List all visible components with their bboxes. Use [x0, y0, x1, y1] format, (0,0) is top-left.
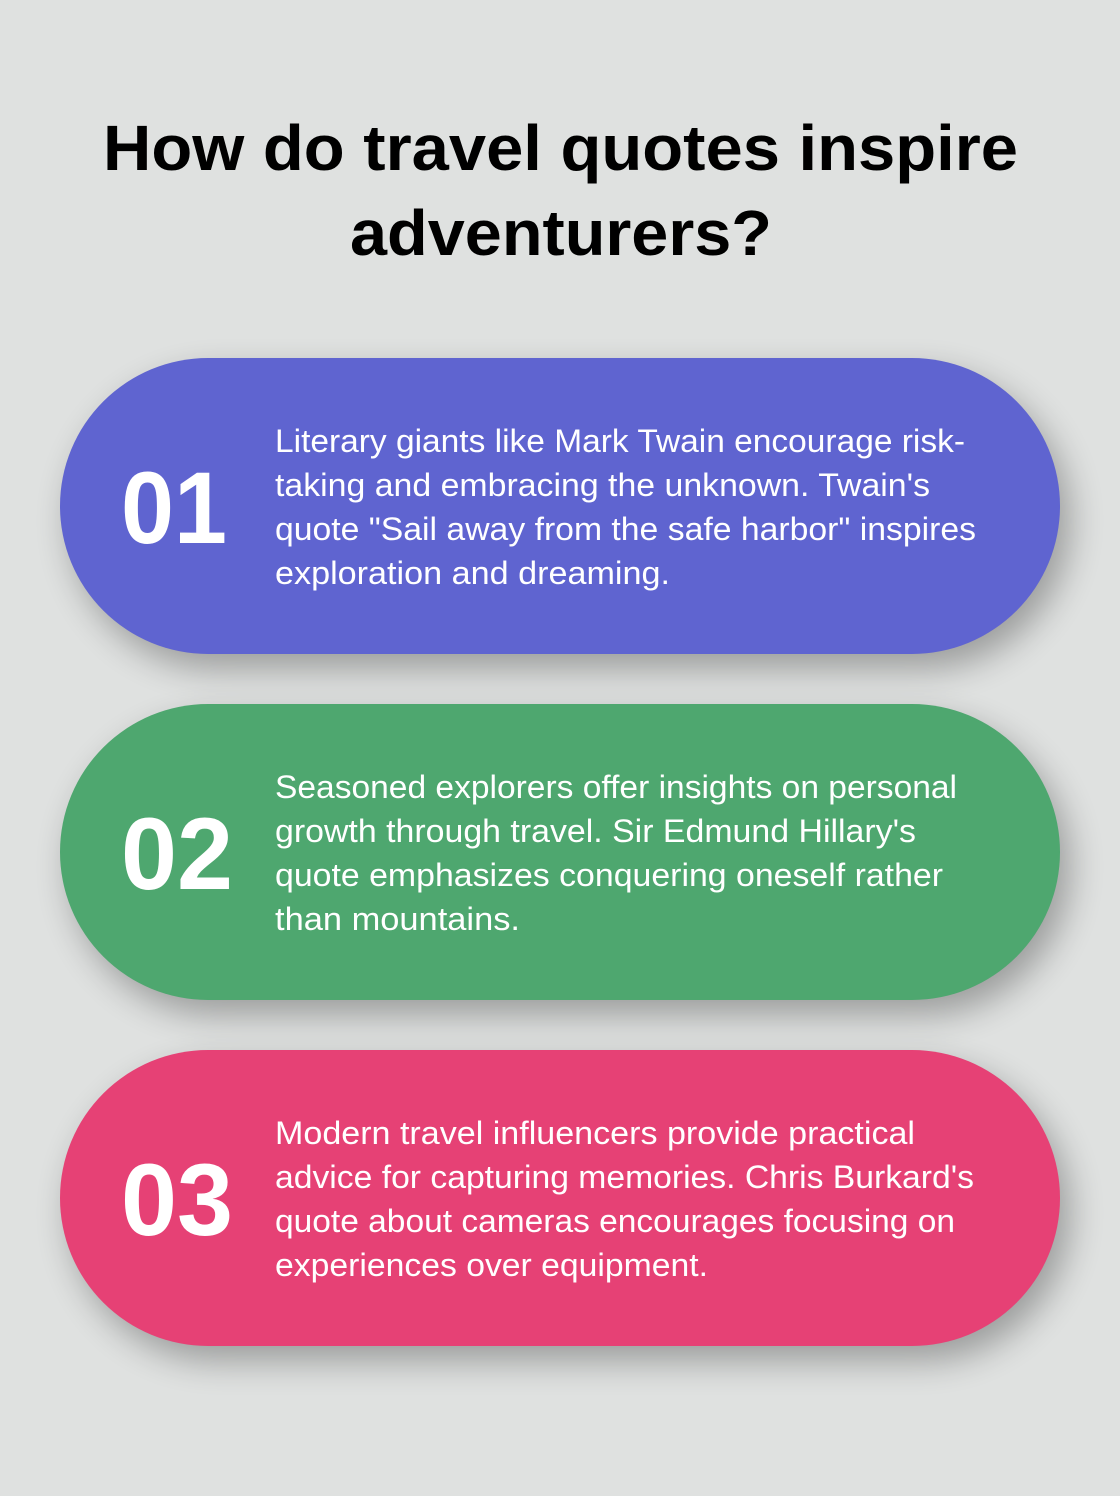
- number 03: 03: [121, 1143, 233, 1257]
- text block: seasoned explorers: quote emphasizes conquering oneself rather: [275, 857, 943, 893]
- panel: step 02: [60, 704, 1070, 1015]
- text block: literary giants: Literary giants like Mark Twain encourage risk-: [275, 423, 965, 459]
- text block: literary giants: taking and embracing the unknown. Twain's: [275, 467, 930, 503]
- title: [103, 112, 1018, 269]
- number 02: 02: [121, 797, 233, 911]
- text block: modern influencers: quote about cameras encourages focusing on: [275, 1203, 955, 1239]
- text block: seasoned explorers: growth through travel. Sir Edmund Hillary's: [275, 813, 916, 849]
- text block: seasoned explorers: [275, 769, 957, 937]
- title: adventurers?: [350, 197, 772, 269]
- text block: modern influencers: advice for capturing memories. Chris Burkard's: [275, 1159, 974, 1195]
- text block: literary giants: exploration and dreaming.: [275, 555, 670, 591]
- number 01: 01: [121, 451, 227, 565]
- panel: step 03: [60, 1050, 1070, 1361]
- panel: step 01: [60, 358, 1070, 669]
- title: How do travel quotes inspire: [103, 112, 1018, 184]
- text block: seasoned explorers: than mountains.: [275, 901, 520, 937]
- text block: modern influencers: Modern travel influencers provide practical: [275, 1115, 915, 1151]
- text block: literary giants: [275, 423, 976, 591]
- text block: seasoned explorers: Seasoned explorers offer insights on personal: [275, 769, 957, 805]
- text block: modern influencers: experiences over equipment.: [275, 1247, 708, 1283]
- text block: modern influencers: [275, 1115, 974, 1283]
- text block: literary giants: quote "Sail away from the safe harbor" inspires: [275, 511, 976, 547]
